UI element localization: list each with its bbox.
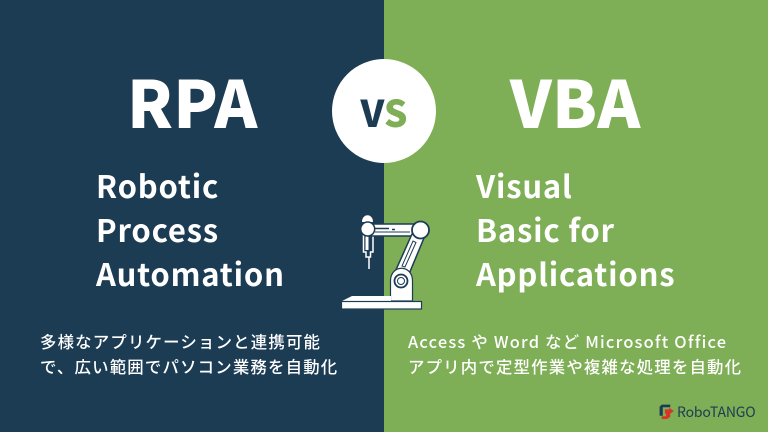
text: RPA full name (96, 162, 285, 295)
base pedestal (390, 268, 412, 301)
tool head (364, 234, 373, 257)
text: RPA full name: Automation (96, 250, 285, 295)
needle (368, 256, 370, 269)
text: VBA full name: Applications (476, 250, 675, 295)
text: VBA description (408, 329, 742, 378)
panel: RPA background (0, 0, 384, 432)
heading: RPA: RPA (127, 53, 257, 147)
text: RPA description: で、広い範囲でパソコン業務を自動化 (40, 354, 338, 378)
diagonal arm (395, 234, 424, 274)
icon: robot arm (342, 215, 430, 310)
logo: RoboTANGO: RoboTANGO (677, 402, 756, 422)
badge: VS circle: VS (360, 84, 408, 138)
panel: VBA background (384, 0, 768, 432)
badge: VS circle (332, 59, 436, 163)
shoulder joint (412, 222, 429, 238)
text: RPA description: 多様なアプリケーションと連携可能 (40, 329, 321, 353)
text: VBA full name (476, 162, 675, 295)
text: VBA full name: Basic for (476, 206, 615, 251)
elbow joint (361, 222, 375, 236)
text: RPA full name: Process (96, 206, 219, 251)
text: VBA full name: Visual (476, 162, 573, 207)
base plate (342, 296, 391, 301)
text: RPA full name: Robotic (96, 162, 219, 207)
heading: VBA: VBA (510, 53, 640, 147)
text: VBA description: Access や Word など Microsoft Office (408, 329, 727, 353)
text: RPA description (40, 329, 338, 378)
text: VBA description: アプリ内で定型作業や複雑な処理を自動化 (408, 354, 742, 378)
horizontal arm (368, 224, 417, 236)
